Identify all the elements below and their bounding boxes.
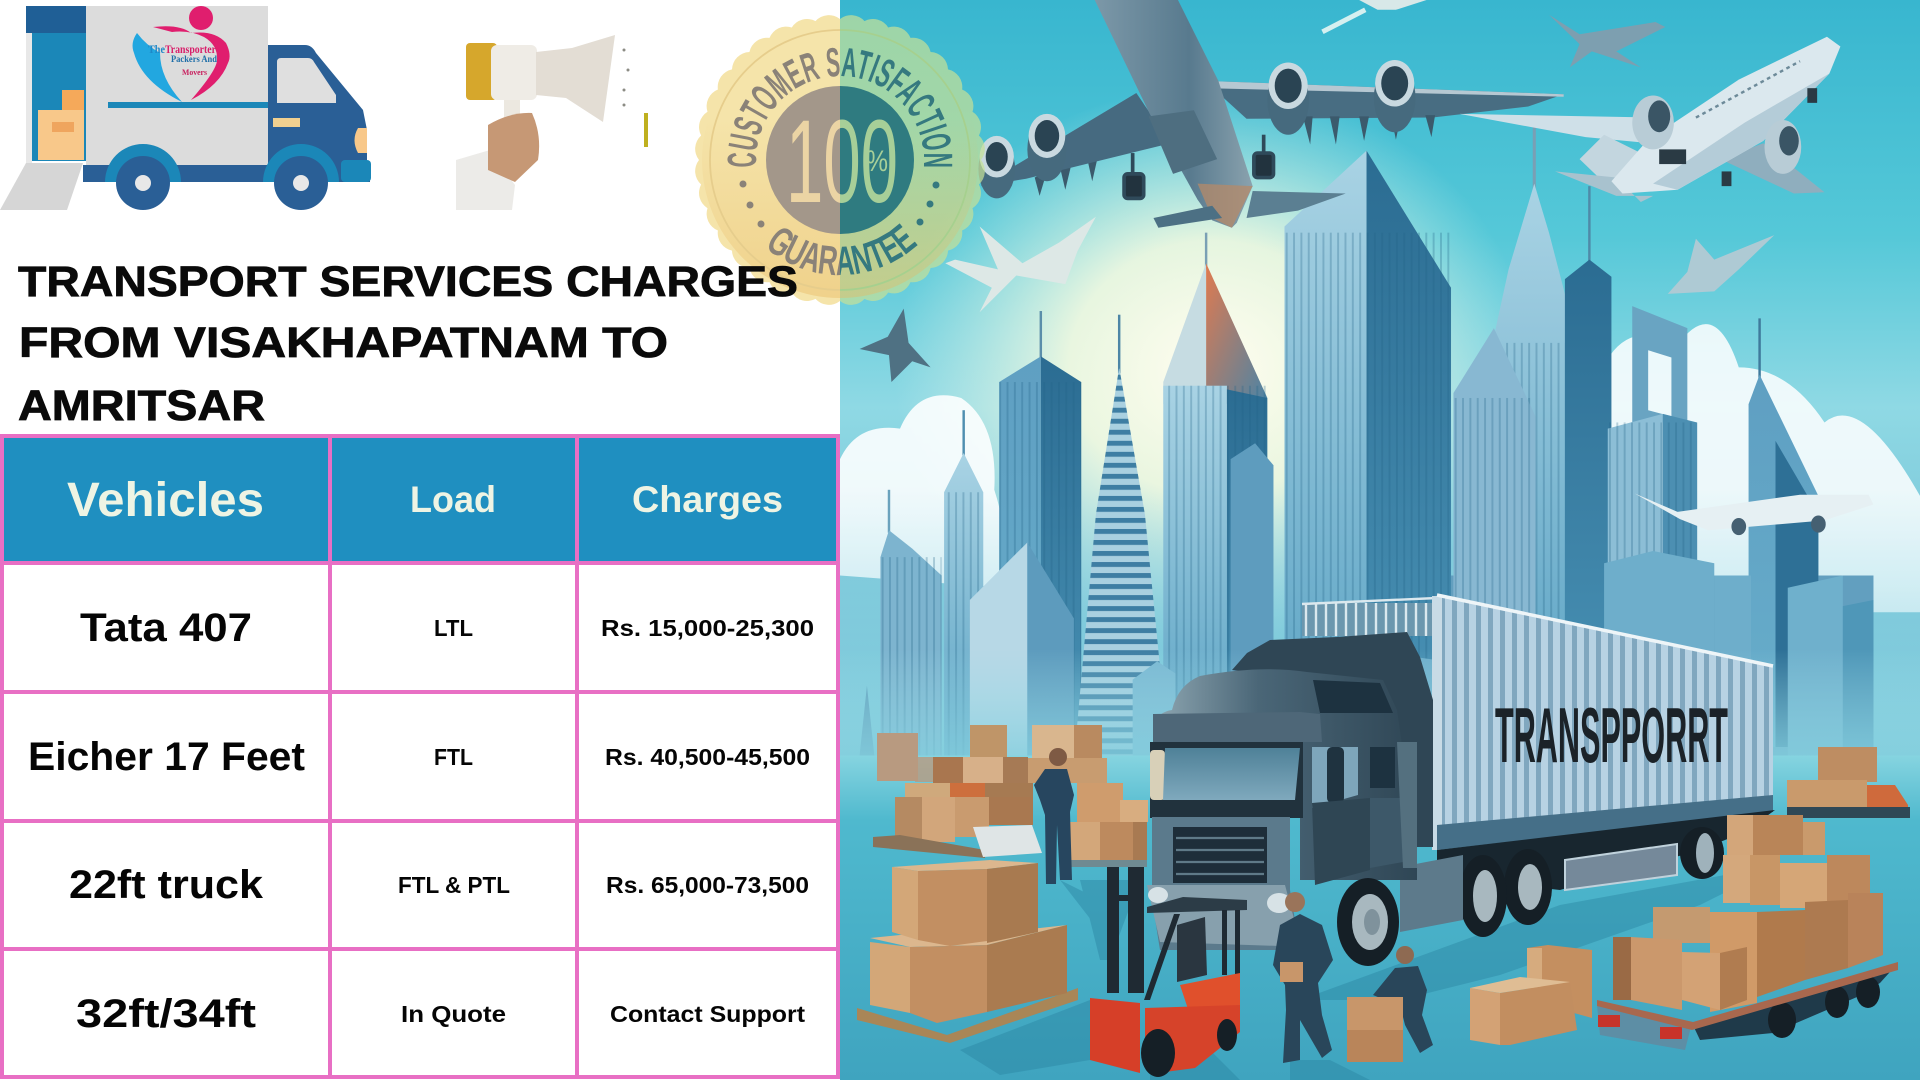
block tower	[1608, 414, 1698, 562]
clouds	[840, 324, 1920, 612]
narrow dark tower	[1564, 186, 1612, 628]
left wedge block	[1454, 328, 1536, 614]
plane lower right	[1635, 493, 1873, 535]
small plane left white	[945, 217, 1096, 312]
small plane dark left	[860, 309, 931, 382]
left dark tower	[999, 311, 1081, 762]
pallets	[873, 835, 1147, 867]
engine 1	[1267, 62, 1309, 135]
sky, city and aircraft	[840, 0, 1920, 1080]
customer satisfaction badge	[695, 15, 985, 305]
title	[18, 258, 798, 430]
seal bottom arc text: GUARANTEE	[769, 223, 918, 276]
overhead guard	[1144, 897, 1247, 1000]
container front post	[1432, 596, 1442, 850]
bumper	[1147, 885, 1305, 960]
small truck cab	[1867, 785, 1908, 817]
flatbed deck	[1597, 962, 1898, 1030]
worker holding box	[1273, 892, 1333, 1063]
rear drive wheels	[1459, 849, 1552, 937]
number 100: 100	[786, 96, 898, 228]
megaphone horn	[536, 35, 615, 122]
row 2 load: FTL	[434, 744, 473, 770]
small plane right	[1668, 235, 1774, 294]
trailer underbody	[1437, 810, 1775, 890]
van door top	[26, 6, 86, 33]
flatbed underframe	[1692, 963, 1898, 1040]
seal dots	[740, 180, 940, 228]
front wheel	[263, 144, 339, 210]
right stack	[1068, 783, 1148, 860]
grille	[1173, 827, 1267, 883]
fourth row	[895, 797, 1033, 842]
lower left tower	[970, 542, 1074, 765]
main tall tower	[1284, 150, 1451, 660]
city base haze	[842, 659, 1919, 756]
top boxes	[1727, 815, 1825, 855]
striped tower	[1077, 314, 1160, 756]
paper sign	[973, 825, 1042, 857]
row 4 load: In Quote	[401, 1001, 506, 1027]
tail lights	[1598, 1015, 1682, 1039]
faded box stack	[877, 733, 940, 782]
right wedge tower	[1749, 318, 1818, 747]
percent sign: %	[866, 145, 888, 178]
right wing	[1205, 81, 1564, 119]
door panel	[1312, 798, 1370, 885]
sky background	[840, 0, 1920, 784]
icon: megaphone in hand	[456, 35, 648, 210]
inner seal circle	[766, 86, 914, 234]
frame building	[1632, 306, 1687, 422]
middle boxes	[1470, 945, 1592, 1045]
forklift wheels	[1141, 1019, 1237, 1077]
cab front face	[1152, 817, 1300, 950]
seal inner rim	[710, 30, 970, 290]
belly shade	[1653, 73, 1829, 190]
pillar highlight	[1150, 750, 1165, 800]
cloud left	[840, 395, 1006, 588]
lower boxes	[1710, 893, 1883, 1012]
row 3 load: FTL & PTL	[398, 872, 510, 898]
small plane top centre	[1322, 0, 1427, 32]
row 2 vehicle: Eicher 17 Feet	[28, 735, 305, 779]
visor band	[1153, 712, 1322, 742]
counterweight	[1090, 998, 1140, 1073]
megaphone handle	[504, 100, 520, 122]
floor shadows	[960, 865, 1780, 1080]
logo blue hand	[133, 33, 182, 102]
logo pink heart	[153, 26, 230, 100]
stacked boxes right	[1597, 815, 1898, 1050]
table grid	[2, 434, 838, 1079]
table header band	[2, 434, 838, 563]
white airliner	[1460, 37, 1840, 202]
small plane top right	[1549, 15, 1665, 67]
row 4 vehicle: 32ft/34ft	[76, 992, 256, 1036]
cab body	[268, 45, 367, 182]
door handle	[273, 118, 300, 127]
logo head	[189, 6, 213, 30]
ramp	[0, 163, 83, 210]
row 4 charges: Contact Support	[610, 1001, 805, 1027]
windows	[1696, 61, 1800, 118]
back box	[1527, 945, 1592, 1018]
side skirt	[1565, 844, 1677, 890]
engine left	[1632, 96, 1674, 149]
logo name The: The	[148, 42, 166, 56]
megaphone rear cap	[466, 43, 497, 100]
small left spire tower	[944, 410, 983, 762]
lower box	[870, 925, 1067, 1023]
wing leading edge	[1205, 81, 1564, 97]
big airliner	[978, 0, 1564, 228]
flap fairings	[1035, 115, 1435, 196]
lower centre blocks	[1420, 551, 1751, 696]
far wing	[1460, 114, 1690, 147]
fuselage	[1095, 0, 1253, 228]
cloud right	[1610, 324, 1920, 612]
second row	[933, 757, 1107, 797]
seal lower warm shade	[702, 22, 978, 298]
row 1 charges: Rs. 15,000-25,300	[601, 615, 814, 641]
title line 1: TRANSPORT SERVICES CHARGES	[18, 258, 798, 306]
front box	[1470, 977, 1577, 1045]
far right small truck with boxes	[1787, 747, 1910, 818]
foreground hazy building	[1133, 661, 1176, 762]
door window	[1312, 747, 1358, 808]
logo name Transporter: Transporter	[165, 42, 217, 56]
city skyline	[860, 120, 1873, 765]
belly fairing	[1149, 110, 1217, 174]
body	[1611, 37, 1840, 193]
forklift mast	[1107, 867, 1144, 993]
background cargo boxes	[873, 725, 1148, 867]
pricing table	[2, 434, 838, 1079]
row 2 charges: Rs. 40,500-45,500	[605, 744, 810, 770]
far left building	[880, 490, 942, 762]
bumper	[341, 160, 371, 182]
row 1 vehicle: Tata 407	[80, 606, 252, 650]
van interior	[32, 33, 86, 161]
stacked boxes left	[857, 860, 1078, 1043]
engines	[978, 60, 1416, 198]
sun glow	[912, 99, 1504, 622]
far right base blocks	[1451, 576, 1873, 759]
cab dome	[1153, 669, 1417, 880]
flatbed wheels	[1768, 976, 1880, 1038]
articulated truck	[1147, 595, 1775, 966]
standing worker	[1034, 748, 1074, 884]
small truck bed	[1787, 807, 1910, 818]
flatbed rear	[1597, 1005, 1692, 1050]
megaphone body	[491, 45, 537, 100]
van interior edge	[26, 33, 32, 163]
headlights	[1148, 887, 1291, 913]
third row	[905, 783, 1033, 799]
seal scalloped disc	[695, 15, 985, 305]
company logo	[133, 6, 230, 102]
panel: transport illustration	[840, 0, 1920, 1080]
upper mid boxes	[1723, 855, 1870, 908]
top boxes	[970, 725, 1102, 758]
upper box	[892, 860, 1038, 946]
landing gear	[1124, 135, 1273, 198]
title line 2: FROM VISAKHAPATNAM TO	[19, 319, 668, 367]
row 3 charges: Rs. 65,000-73,500	[606, 872, 809, 898]
tail	[1580, 135, 1653, 190]
ground	[840, 756, 1920, 1080]
tail section	[1198, 184, 1253, 228]
logo name line 2: Packers And	[171, 54, 217, 64]
parcels	[38, 90, 84, 160]
left wing	[981, 93, 1171, 186]
tailplanes	[1247, 191, 1346, 218]
header: Charges: Charges	[632, 479, 783, 520]
roof window	[1313, 680, 1393, 713]
headlight	[354, 128, 367, 153]
mid low tower	[1230, 444, 1274, 672]
front box	[1682, 947, 1747, 1010]
forklift seat	[1177, 917, 1207, 982]
tail fin	[1555, 171, 1653, 202]
gear	[1659, 88, 1817, 186]
windshield frame	[1150, 742, 1303, 818]
yellow sliver	[644, 113, 648, 147]
empire-style tower	[1496, 128, 1565, 620]
mirror	[1327, 747, 1344, 803]
roof fairing	[1232, 632, 1433, 847]
seal top arc text: CUSTOMER SATISFACTION	[727, 48, 952, 167]
orange-roof tower	[1163, 233, 1267, 753]
megaphone sleeve	[456, 150, 515, 210]
trailer wheel	[1680, 827, 1724, 879]
engine 4	[978, 136, 1015, 198]
forklift body	[1145, 1005, 1240, 1072]
container side	[1437, 596, 1773, 850]
front wheel	[1337, 878, 1399, 966]
row 3 vehicle: 22ft truck	[69, 863, 264, 907]
header: Load: Load	[410, 479, 496, 520]
chassis	[83, 165, 370, 182]
rear wheel	[105, 144, 181, 210]
cab window	[277, 58, 336, 103]
container top edge	[1437, 595, 1773, 666]
small truck top boxes	[1818, 747, 1877, 782]
van stripe	[108, 102, 268, 108]
lower back boxes	[1613, 907, 1710, 1010]
title line 3: AMRITSAR	[18, 382, 265, 430]
logo delivery van	[0, 6, 371, 210]
windshield	[1163, 748, 1300, 800]
headboard rack	[1302, 598, 1437, 636]
mini spire	[860, 686, 874, 756]
pallet left	[857, 988, 1078, 1043]
sound dots	[622, 48, 630, 106]
rear door panel	[1370, 798, 1403, 868]
cab rear post	[1397, 742, 1417, 868]
door rear window	[1370, 747, 1395, 788]
header: Vehicles: Vehicles	[67, 474, 264, 527]
engine cover	[1180, 973, 1240, 1015]
forklift	[1090, 867, 1247, 1077]
far right blocks	[1788, 576, 1873, 765]
engine 2	[1374, 60, 1416, 132]
logo name line 3: Movers	[182, 68, 207, 77]
row 1 load: LTL	[434, 615, 473, 641]
seal number 100 percent	[786, 96, 898, 228]
near wing	[1720, 143, 1824, 193]
side step fairing	[1400, 855, 1463, 932]
engine 3	[1027, 114, 1067, 181]
engine right	[1764, 120, 1801, 174]
van cargo box	[86, 6, 268, 166]
pale left haze	[840, 520, 1920, 742]
worker lifting box	[1347, 946, 1433, 1062]
small truck lower boxes	[1787, 780, 1867, 807]
hand	[488, 113, 539, 182]
curtain tie band	[1437, 795, 1773, 850]
